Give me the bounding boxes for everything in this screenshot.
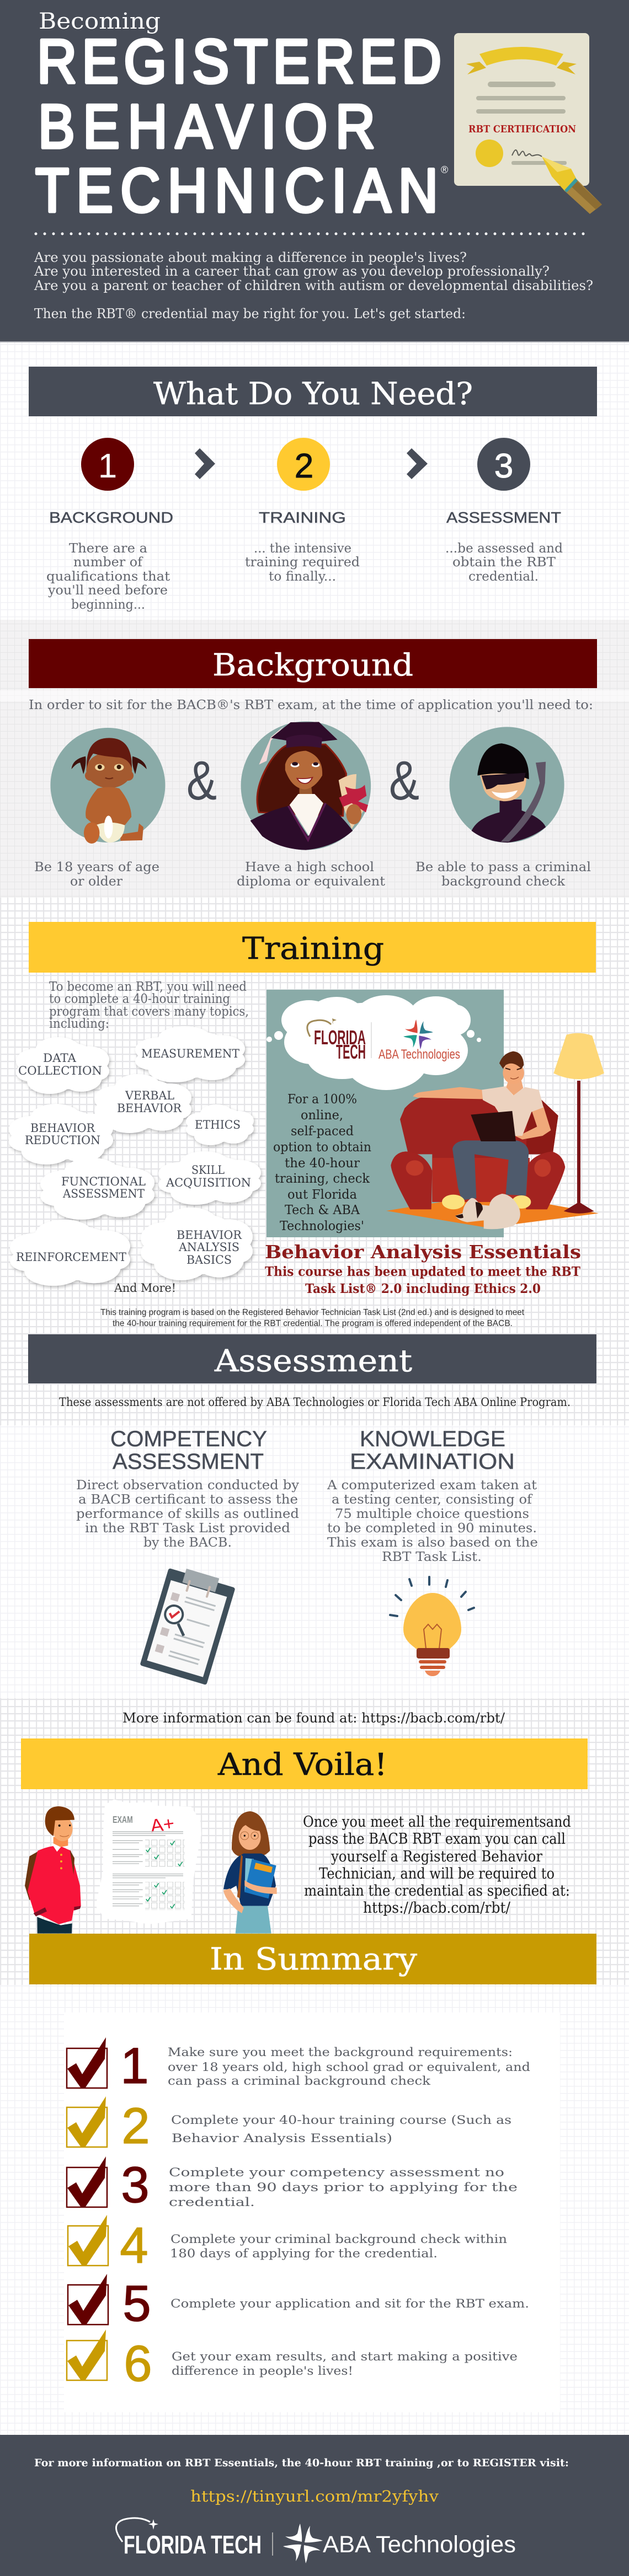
course title: Behavior Analysis Essentials bbox=[265, 1241, 581, 1263]
captions: or older bbox=[70, 874, 122, 889]
item 1: over 18 years old, high school grad or equivalent, and bbox=[168, 2060, 530, 2074]
intro text: to complete a 40-hour training bbox=[49, 992, 230, 1006]
topic labels: BEHAVIOR bbox=[177, 1228, 242, 1242]
item 2: Complete your 40-hour training course (Such as bbox=[171, 2113, 511, 2127]
step labels bbox=[49, 509, 561, 526]
column heading: knowledge examination: KNOWLEDGE bbox=[360, 1427, 505, 1451]
topic labels: BASICS bbox=[186, 1253, 232, 1266]
illustration: exam paper: EXAM bbox=[113, 1814, 133, 1825]
step 1 circle bbox=[81, 438, 134, 491]
heading banner bbox=[29, 922, 596, 973]
illustration: man on armchair with lamp and dog bbox=[386, 1033, 604, 1229]
item 4: 180 days of applying for the credential. bbox=[170, 2247, 438, 2260]
step labels: TRAINING bbox=[259, 509, 346, 526]
step 3 circle: 3 bbox=[494, 447, 513, 485]
item 3: 3 bbox=[121, 2157, 150, 2213]
column heading: competency assessment bbox=[110, 1427, 267, 1474]
knowledge text bbox=[327, 1478, 538, 1564]
course note: Task List® 2.0 including Ethics 2.0 bbox=[305, 1281, 541, 1296]
knowledge text: A computerized exam taken at bbox=[327, 1478, 537, 1493]
item 3 bbox=[67, 2156, 518, 2213]
logo: ABA Technologies bbox=[283, 2524, 516, 2563]
panel: training bbox=[9, 922, 604, 1328]
step 1 text: beginning... bbox=[71, 598, 145, 612]
competency text: performance of skills as outlined bbox=[76, 1507, 299, 1521]
item 4: 4 bbox=[120, 2218, 148, 2274]
intro text: Then the RBT® credential may be right for you. Let's get started: bbox=[34, 306, 466, 321]
course note: This course has been updated to meet the RBT bbox=[265, 1264, 580, 1279]
knowledge text: a testing center, consisting of bbox=[332, 1493, 533, 1507]
captions: background check bbox=[441, 874, 566, 889]
topic labels: MEASUREMENT bbox=[141, 1047, 239, 1060]
intro text: Are you a parent or teacher of children with autism or developmental disabilities? bbox=[34, 278, 593, 293]
topic labels bbox=[16, 1047, 251, 1266]
intro line: In order to sit for the BACB®'s RBT exam, at the time of application you'll need to: bbox=[29, 698, 593, 712]
step 3 circle bbox=[477, 438, 530, 491]
topic labels: VERBAL bbox=[125, 1089, 174, 1102]
step 1 text: There are a bbox=[69, 541, 147, 556]
step 1 circle: 1 bbox=[98, 447, 117, 485]
closing text: maintain the credential as specified at: bbox=[304, 1882, 570, 1899]
panel: background bbox=[29, 639, 597, 889]
step 1 text: qualifications that bbox=[46, 570, 170, 584]
ampersand: & bbox=[389, 750, 419, 812]
illustration: thief bbox=[450, 727, 564, 842]
more info line: More information can be found at: https://bacb.com/rbt/ bbox=[122, 1710, 505, 1726]
step labels: ASSESSMENT bbox=[446, 509, 561, 526]
item 3: more than 90 days prior to applying for the bbox=[169, 2181, 518, 2194]
icon: clipboard bbox=[140, 1564, 237, 1685]
icon: certificate with pen: RBT CERTIFICATION bbox=[468, 124, 576, 135]
logo: Florida Tech: FLORIDA TECH bbox=[124, 2530, 262, 2559]
disclaimer bbox=[100, 1308, 525, 1328]
topic labels: ETHICS bbox=[195, 1118, 241, 1131]
item 4 bbox=[68, 2215, 507, 2274]
logo: Florida Tech: FLORIDA bbox=[314, 1026, 366, 1049]
topic labels: ANALYSIS bbox=[178, 1241, 239, 1254]
heading banner bbox=[29, 1934, 596, 1984]
topic labels: FUNCTIONAL bbox=[61, 1175, 146, 1188]
item 6: Get your exam results, and start making a positive bbox=[172, 2350, 518, 2363]
closing text bbox=[303, 1813, 571, 1917]
item 3: credential. bbox=[169, 2196, 255, 2209]
footer text: For more information on RBT Essentials, the 40-hour RBT training ,or to REGISTER visit: bbox=[34, 2457, 569, 2469]
title: Registered Behavior Technician: REGISTERED bbox=[37, 28, 441, 96]
divider dots bbox=[36, 233, 592, 235]
logo: Florida Tech bbox=[116, 2518, 262, 2559]
topic labels: REDUCTION bbox=[25, 1134, 100, 1147]
title: Registered Behavior Technician bbox=[35, 28, 441, 225]
competency text: a BACB certificant to assess the bbox=[78, 1493, 298, 1507]
heading banner bbox=[29, 639, 597, 688]
topic labels: ASSESSMENT bbox=[62, 1187, 145, 1200]
topic labels: COLLECTION bbox=[18, 1064, 102, 1077]
intro text: To become an RBT, you will need bbox=[49, 980, 247, 994]
and more: And More! bbox=[114, 1281, 176, 1295]
logo: ABA Technologies: ABA Technologies bbox=[379, 1047, 460, 1062]
captions: Be 18 years of age bbox=[34, 860, 159, 874]
closing text: Once you meet all the requirementsand bbox=[303, 1813, 571, 1831]
item 5: Complete your application and sit for the RBT exam. bbox=[170, 2297, 529, 2310]
intro text bbox=[34, 250, 593, 321]
item 2 bbox=[67, 2096, 511, 2154]
heading banner: And Voila! bbox=[217, 1747, 387, 1782]
column heading: knowledge examination bbox=[350, 1427, 515, 1474]
title: Registered Behavior Technician: BEHAVIOR bbox=[38, 93, 375, 161]
knowledge text: RBT Task List. bbox=[382, 1550, 482, 1564]
topic labels: REINFORCEMENT bbox=[16, 1251, 126, 1264]
promo text: the 40-hour bbox=[285, 1156, 360, 1171]
heading: Becoming: Becoming bbox=[39, 9, 161, 34]
promo text: option to obtain bbox=[273, 1140, 371, 1155]
closing text: https://bacb.com/rbt/ bbox=[363, 1899, 511, 1917]
item 6: difference in people's lives! bbox=[172, 2364, 353, 2378]
arrow bbox=[195, 448, 215, 479]
competency text bbox=[76, 1478, 299, 1550]
promo text bbox=[273, 1092, 371, 1233]
promo text: self-paced bbox=[291, 1124, 354, 1139]
title: Registered Behavior Technician: TECHNICIAN bbox=[35, 157, 438, 225]
item 2: 2 bbox=[121, 2098, 150, 2154]
item 2: Behavior Analysis Essentials) bbox=[172, 2132, 392, 2145]
topic labels: BEHAVIOR bbox=[30, 1121, 95, 1135]
panel: course promo bbox=[266, 990, 504, 1237]
panel: what do you need bbox=[29, 367, 597, 612]
step 2 circle bbox=[277, 438, 330, 491]
promo text: Tech & ABA bbox=[285, 1203, 360, 1217]
illustration: boy with backpack bbox=[25, 1806, 81, 1934]
course note bbox=[265, 1264, 580, 1296]
closing text: pass the BACB RBT exam you can call bbox=[308, 1831, 566, 1848]
panel: header bbox=[0, 0, 629, 342]
illustration: exam paper bbox=[95, 1799, 201, 1924]
step 1 text: you'll need before bbox=[47, 583, 168, 598]
panel: footer bbox=[0, 2435, 629, 2576]
promo text: online, bbox=[301, 1108, 343, 1123]
illustration: girl with book bbox=[223, 1811, 277, 1934]
item 4: Complete your criminal background check within bbox=[170, 2232, 507, 2246]
icon: light bulb bbox=[390, 1577, 474, 1676]
intro text: Are you passionate about making a difference in people's lives? bbox=[34, 250, 467, 265]
topic clouds bbox=[9, 1026, 261, 1286]
arrow bbox=[407, 448, 428, 479]
promo text: out Florida bbox=[287, 1188, 357, 1202]
panel: and voila bbox=[21, 1738, 588, 1934]
item 6: 6 bbox=[124, 2336, 152, 2392]
step labels: BACKGROUND bbox=[49, 509, 173, 526]
step 3 text: obtain the RBT bbox=[452, 555, 556, 570]
heading banner: Background bbox=[212, 647, 413, 683]
step 3 text: ...be assessed and bbox=[445, 541, 563, 556]
panel: assessment bbox=[28, 1334, 596, 1726]
item 1: Make sure you meet the background requirements: bbox=[168, 2046, 513, 2059]
competency text: in the RBT Task List provided bbox=[85, 1521, 290, 1536]
heading banner: In Summary bbox=[210, 1941, 417, 1977]
closing text: yourself a Registered Behavior bbox=[331, 1848, 542, 1865]
logo: Florida Tech bbox=[307, 1018, 366, 1063]
heading banner bbox=[29, 367, 597, 416]
topic labels: DATA bbox=[43, 1051, 77, 1065]
promo text: For a 100% bbox=[287, 1092, 357, 1107]
illustration: baby bbox=[50, 728, 165, 844]
competency text: Direct observation conducted by bbox=[76, 1478, 299, 1493]
intro text: program that covers many topics, bbox=[49, 1005, 249, 1019]
promo text: Technologies' bbox=[280, 1219, 364, 1233]
step 2 text bbox=[245, 541, 360, 584]
intro text: including: bbox=[49, 1017, 109, 1031]
logo: Florida Tech: TECH bbox=[336, 1040, 366, 1063]
topic labels: ACQUISITION bbox=[166, 1176, 251, 1189]
step 2 circle: 2 bbox=[295, 447, 313, 485]
captions: diploma or equivalent bbox=[237, 874, 386, 889]
step 1 text: number of bbox=[73, 555, 143, 570]
disclaimer: the 40-hour training requirement for the RBT credential. The program is offered independent of the BACB. bbox=[113, 1319, 513, 1328]
logo: ABA Technologies: ABA Technologies bbox=[323, 2531, 516, 2558]
ampersand: & bbox=[186, 750, 217, 812]
heading banner bbox=[21, 1738, 588, 1789]
captions bbox=[34, 860, 591, 889]
column heading: competency assessment: COMPETENCY bbox=[110, 1427, 267, 1451]
panel: in summary bbox=[29, 1934, 596, 2412]
step 2 text: to finally... bbox=[269, 570, 336, 584]
promo text: training, check bbox=[275, 1172, 370, 1186]
column heading: knowledge examination: EXAMINATION bbox=[350, 1450, 515, 1474]
heading banner bbox=[28, 1334, 596, 1383]
item 1: can pass a criminal background check bbox=[168, 2074, 430, 2087]
topic labels: BEHAVIOR bbox=[117, 1102, 182, 1115]
heading banner: What Do You Need? bbox=[153, 376, 473, 411]
summary card bbox=[64, 2012, 560, 2412]
topic labels: SKILL bbox=[191, 1163, 225, 1177]
intro text bbox=[49, 980, 249, 1031]
step 1 text bbox=[46, 541, 170, 612]
step 2 text: training required bbox=[245, 555, 360, 570]
captions: Be able to pass a criminal bbox=[415, 860, 591, 874]
disclaimer line: These assessments are not offered by ABA Technologies or Florida Tech ABA Online Program. bbox=[59, 1396, 571, 1409]
disclaimer: This training program is based on the Registered Behavior Technician Task List (2nd ed.) and is designed to meet bbox=[100, 1308, 525, 1317]
closing text: Technician, and will be required to bbox=[319, 1865, 555, 1882]
step 2 text: ... the intensive bbox=[254, 541, 351, 556]
item 6 bbox=[67, 2330, 518, 2392]
logo: ABA Technologies bbox=[379, 1019, 460, 1062]
item 1: 1 bbox=[120, 2038, 149, 2094]
intro text: Are you interested in a career that can grow as you develop professionally? bbox=[34, 264, 550, 279]
step 3 text bbox=[445, 541, 563, 584]
item 3: Complete your competency assessment no bbox=[169, 2166, 504, 2179]
thought cloud with logos bbox=[266, 995, 481, 1090]
competency text: by the BACB. bbox=[143, 1536, 232, 1550]
captions: Have a high school bbox=[245, 860, 374, 874]
illustration: exam paper: A+ bbox=[149, 1813, 175, 1837]
icon: certificate with pen bbox=[454, 33, 602, 214]
url: https://tinyurl.com/mr2yfyhv bbox=[190, 2487, 439, 2505]
step 3 text: credential. bbox=[468, 570, 539, 584]
heading banner: Assessment bbox=[214, 1343, 412, 1378]
item 1 bbox=[67, 2037, 530, 2094]
heading banner: Training bbox=[242, 931, 384, 966]
item 5: 5 bbox=[122, 2276, 151, 2332]
knowledge text: to be completed in 90 minutes. bbox=[327, 1521, 537, 1536]
column heading: competency assessment: ASSESSMENT bbox=[113, 1450, 264, 1474]
knowledge text: 75 multiple choice questions bbox=[335, 1507, 529, 1521]
illustration: graduate bbox=[241, 721, 371, 850]
item 5 bbox=[68, 2274, 529, 2332]
knowledge text: This exam is also based on the bbox=[327, 1536, 538, 1550]
registered mark: ® bbox=[441, 164, 448, 175]
